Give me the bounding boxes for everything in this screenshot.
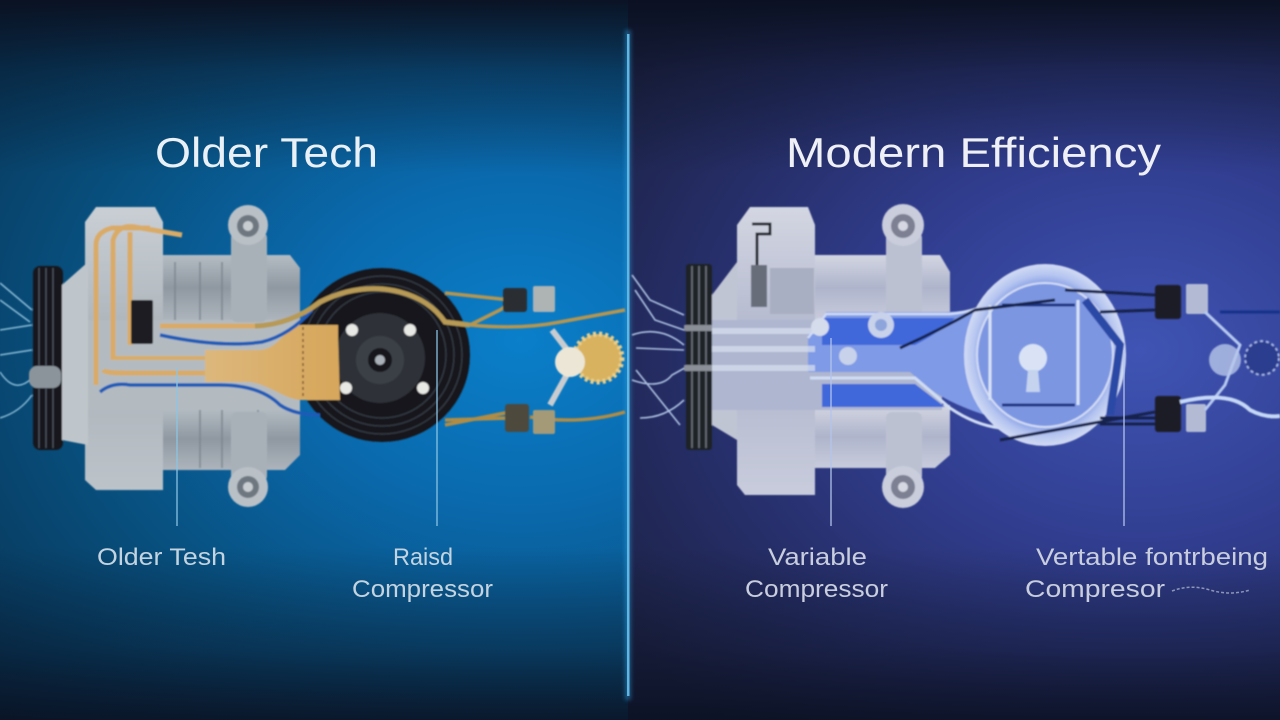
gear xyxy=(550,330,622,405)
label: variable compressor detail xyxy=(1025,544,1268,603)
connectors xyxy=(1155,284,1208,432)
label: fixed compressor xyxy=(352,544,493,603)
illustration: older fixed compressor xyxy=(0,205,625,507)
black clutch disc xyxy=(294,268,470,442)
panel: modern efficiency background xyxy=(628,0,1280,720)
leader lines right xyxy=(831,338,1124,526)
black valve xyxy=(131,300,153,344)
bosses xyxy=(811,312,894,365)
heading: Older Tech: Older Tech xyxy=(155,129,378,176)
gold manifold plate xyxy=(205,325,340,400)
housing xyxy=(712,207,950,495)
center divider xyxy=(625,30,631,700)
right upper pipes xyxy=(445,293,625,327)
illustration: modern variable compressor xyxy=(632,204,1280,508)
mounting ear bottom xyxy=(882,412,924,508)
label: variable compressor: Compressor xyxy=(745,576,888,603)
blue flow channel xyxy=(808,298,1000,428)
label: fixed compressor: Raisd xyxy=(393,544,453,571)
connectors xyxy=(503,286,555,434)
label: fixed compressor: Compressor xyxy=(352,576,493,603)
label: variable compressor xyxy=(745,544,888,603)
housing xyxy=(62,207,300,490)
panel: older tech background xyxy=(0,0,628,720)
label: variable compressor detail: Compresor xyxy=(1025,576,1165,603)
label: variable compressor detail: Vertable fontrbeing xyxy=(1036,544,1268,571)
variable pulley xyxy=(684,264,714,450)
label: variable compressor: Variable xyxy=(768,544,867,571)
drive belt xyxy=(29,266,63,450)
wisps and flow on right xyxy=(1180,312,1280,416)
mounting ear top xyxy=(882,204,924,322)
dark control lines xyxy=(900,290,1155,440)
tubes over body xyxy=(712,331,815,368)
heading: Modern Efficiency: Modern Efficiency xyxy=(786,129,1161,176)
leader lines xyxy=(177,330,437,526)
mounting ear top xyxy=(228,205,268,322)
right lower pipes xyxy=(445,412,625,425)
mounting ear bottom xyxy=(228,412,268,507)
label: older tech: Older Tesh xyxy=(97,544,226,571)
lightning wisps left xyxy=(632,275,690,425)
discharge wisps left xyxy=(0,283,32,418)
blue refrigerant lines xyxy=(100,310,320,415)
copper tubes xyxy=(96,227,262,385)
translucent disc xyxy=(964,264,1126,446)
olive suction pipe xyxy=(255,289,470,326)
